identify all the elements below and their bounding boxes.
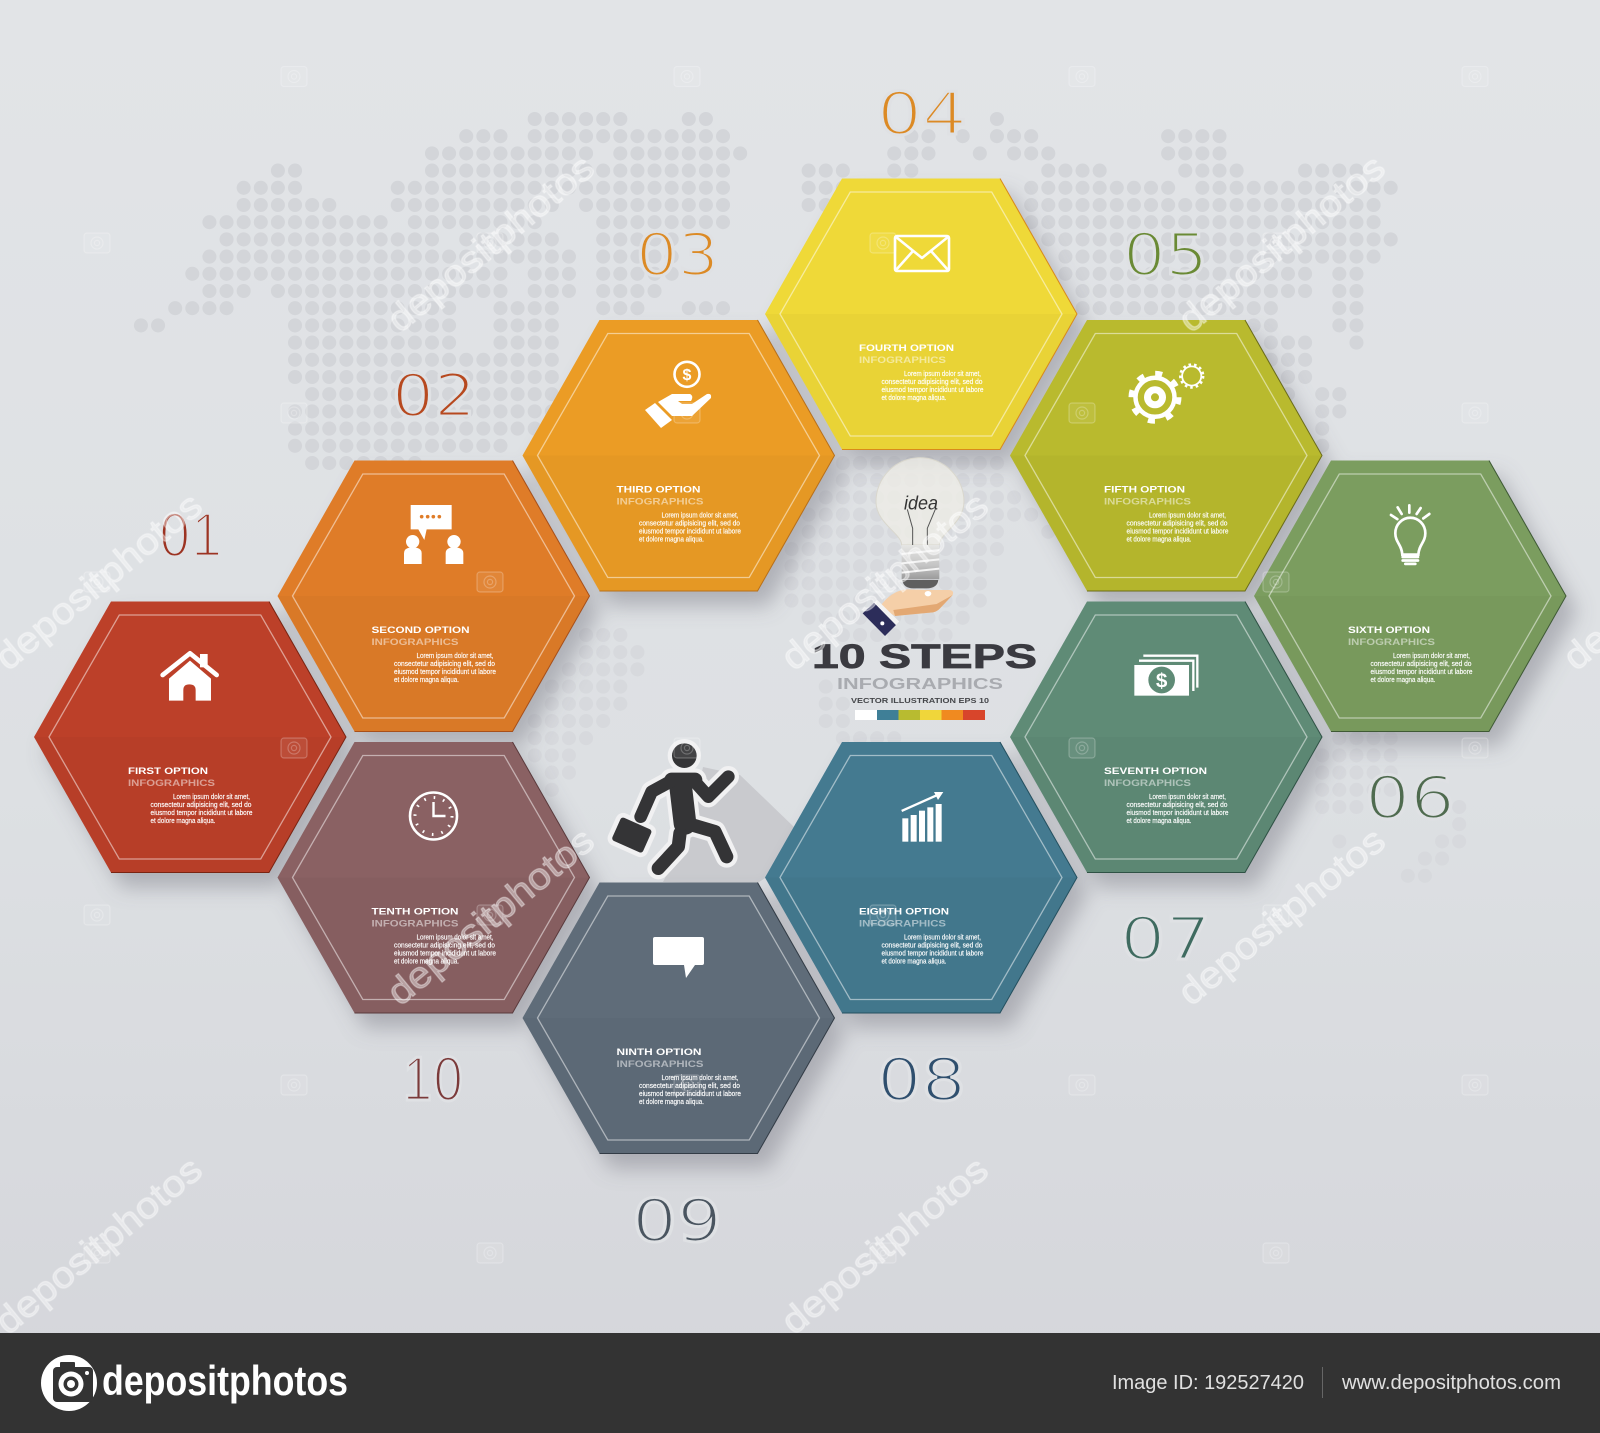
text: ninth option: [616, 1047, 741, 1106]
step numbers: 07: [1120, 904, 1211, 973]
icon: gears: [1132, 365, 1203, 421]
panel: step 8: [765, 742, 1077, 1013]
icon: house: [163, 653, 217, 701]
text: first option: [128, 766, 252, 825]
text: eighth option: [859, 906, 984, 966]
text: sixth option: consectetur adipisicing elit, sed do: [1370, 659, 1472, 668]
text: second option: Lorem ipsum dolor sit amet,: [416, 651, 494, 660]
text: fourth option: [859, 343, 984, 402]
text: second option: et dolore magna aliqua.: [394, 675, 459, 684]
text: ninth option: et dolore magna aliqua.: [639, 1097, 704, 1106]
step numbers: 10: [403, 1045, 464, 1114]
text: sixth option: INFOGRAPHICS: [1348, 637, 1435, 648]
step numbers: 06: [1365, 763, 1455, 832]
text: third option: [616, 484, 741, 544]
panel: step 10: [278, 742, 590, 1013]
text: third option: Lorem ipsum dolor sit amet,: [662, 510, 738, 520]
text: fourth option: FOURTH OPTION: [859, 343, 954, 354]
text: eighth option: et dolore magna aliqua.: [882, 956, 946, 966]
illustration: idea bulb on a hand: [863, 458, 964, 636]
text: third option: INFOGRAPHICS: [616, 496, 704, 508]
step numbers: [158, 79, 1455, 1255]
step numbers: 04: [877, 79, 967, 148]
text: first option: consectetur adipisicing elit, sed do: [150, 800, 252, 809]
step numbers: 01: [158, 501, 222, 570]
centre title block: [812, 458, 1037, 720]
text: second option: SECOND OPTION: [372, 625, 470, 636]
text: tenth option: consectetur adipisicing elit, sed do: [394, 940, 495, 950]
panel: step 9: [522, 882, 834, 1154]
text: tenth option: et dolore magna aliqua.: [394, 956, 459, 966]
text: fifth option: et dolore magna aliqua.: [1126, 534, 1192, 544]
panel: step 4: [765, 178, 1077, 450]
text: first option: FIRST OPTION: [128, 766, 208, 777]
heading: 10 steps: 10 STEPS: [812, 638, 1037, 676]
text: tenth option: Lorem ipsum dolor sit amet,: [416, 932, 494, 942]
panel: step 7: [1010, 602, 1322, 872]
text: seventh option: INFOGRAPHICS: [1104, 778, 1191, 789]
shadow behind runner: [663, 767, 794, 884]
icon: light bulb: [1391, 505, 1429, 564]
text: fifth option: FIFTH OPTION: [1104, 484, 1185, 496]
text: sixth option: eiusmod tempor incididunt ut labore: [1370, 667, 1472, 676]
text: fifth option: Lorem ipsum dolor sit amet,: [1149, 510, 1226, 520]
text: fifth option: INFOGRAPHICS: [1104, 496, 1191, 508]
text: seventh option: eiusmod tempor incididunt ut labore: [1126, 808, 1228, 817]
step numbers: 08: [877, 1045, 966, 1114]
step numbers: 09: [632, 1186, 722, 1255]
icon: rising bar chart: [902, 792, 943, 842]
text: second option: eiusmod tempor incididunt ut labore: [394, 667, 496, 676]
text: seventh option: et dolore magna aliqua.: [1126, 816, 1192, 825]
text: fifth option: consectetur adipisicing elit, sed do: [1126, 518, 1228, 528]
watermark text: depositphotos: [379, 146, 602, 340]
text: sixth option: [1348, 625, 1472, 684]
text: first option: Lorem ipsum dolor sit amet,: [173, 792, 250, 801]
watermark text: depositphotos: [1170, 819, 1393, 1013]
step numbers: 03: [636, 220, 719, 289]
text: seventh option: SEVENTH OPTION: [1104, 766, 1207, 777]
step numbers: 02: [392, 361, 476, 430]
text: second option: INFOGRAPHICS: [372, 637, 459, 648]
logo wordmark: depositphotos: [102, 1357, 348, 1404]
footer banner: [0, 1333, 1600, 1433]
text: eighth option: INFOGRAPHICS: [859, 918, 946, 930]
hexagon drop shadows: [45, 194, 1577, 1168]
illustration: idea bulb on a hand: idea: [904, 493, 938, 514]
text: tenth option: eiusmod tempor incididunt ut labore: [394, 948, 496, 958]
text: fourth option: eiusmod tempor incididunt ut labore: [882, 385, 984, 394]
text: ninth option: consectetur adipisicing elit, sed do: [639, 1081, 740, 1090]
text: eighth option: eiusmod tempor incididunt ut labore: [882, 948, 984, 958]
text: ninth option: eiusmod tempor incididunt ut labore: [639, 1089, 741, 1098]
icon: hand with coin: $: [683, 367, 692, 384]
text: third option: THIRD OPTION: [616, 484, 701, 496]
colour bar legend: [855, 710, 985, 720]
caption: vector illustration: VECTOR ILLUSTRATION EPS 10: [851, 696, 989, 705]
text: eighth option: EIGHTH OPTION: [859, 906, 949, 918]
text: tenth option: [372, 906, 496, 966]
text: tenth option: TENTH OPTION: [372, 906, 459, 918]
text: fourth option: et dolore magna aliqua.: [882, 393, 946, 402]
watermark text: depositphotos: [1170, 146, 1393, 340]
panel: step 6: [1254, 460, 1566, 732]
text: seventh option: [1104, 766, 1228, 825]
text: eighth option: Lorem ipsum dolor sit amet,: [904, 932, 981, 942]
text: ninth option: Lorem ipsum dolor sit amet,: [662, 1073, 738, 1082]
text: sixth option: et dolore magna aliqua.: [1370, 675, 1436, 684]
watermark text: depositphotos: [379, 819, 602, 1013]
text: second option: consectetur adipisicing elit, sed do: [394, 659, 495, 668]
text: fourth option: INFOGRAPHICS: [859, 355, 946, 366]
panel: step 5: [1010, 320, 1322, 591]
text: fifth option: eiusmod tempor incididunt ut labore: [1126, 526, 1228, 536]
icon: people talking: [404, 505, 463, 564]
text: ninth option: NINTH OPTION: [616, 1047, 702, 1058]
text: fourth option: Lorem ipsum dolor sit amet,: [904, 369, 981, 378]
panel: step 2: [278, 460, 590, 732]
site url: www.depositphotos.com: [1341, 1371, 1561, 1394]
step numbers: 05: [1123, 220, 1208, 289]
text: sixth option: SIXTH OPTION: [1348, 625, 1430, 636]
text: eighth option: consectetur adipisicing elit, sed do: [882, 940, 982, 950]
icon: clock: [410, 792, 457, 840]
image id: Image ID: 192527420: [1112, 1371, 1304, 1394]
watermark text: depositphotos: [773, 484, 996, 678]
icon: banknotes: [1134, 656, 1197, 696]
runner with briefcase: [613, 739, 728, 868]
text: fourth option: consectetur adipisicing elit, sed do: [882, 377, 982, 386]
text: second option: [372, 625, 496, 684]
text: first option: INFOGRAPHICS: [128, 778, 215, 789]
text: sixth option: Lorem ipsum dolor sit amet,: [1393, 651, 1470, 660]
icon: speech bubble: [653, 937, 704, 978]
text: ninth option: INFOGRAPHICS: [616, 1059, 704, 1070]
text: third option: eiusmod tempor incididunt ut labore: [639, 526, 741, 536]
text: first option: et dolore magna aliqua.: [150, 816, 216, 825]
dotted world map: [141, 119, 1461, 876]
icon: hand with coin: [645, 362, 711, 428]
subheading: infographics: INFOGRAPHICS: [837, 676, 1003, 693]
logo icon: camera in circle: [41, 1355, 97, 1411]
icon: envelope: [895, 236, 949, 271]
text: third option: consectetur adipisicing elit, sed do: [639, 518, 740, 528]
text: seventh option: consectetur adipisicing elit, sed do: [1126, 800, 1228, 809]
watermark text: depositphotos: [773, 1148, 996, 1342]
text: fifth option: [1104, 484, 1228, 544]
icon: banknotes: $: [1156, 670, 1168, 693]
panel: step 1: [34, 602, 346, 872]
text: seventh option: Lorem ipsum dolor sit amet,: [1149, 792, 1226, 801]
text: tenth option: INFOGRAPHICS: [372, 918, 459, 930]
text: third option: et dolore magna aliqua.: [639, 534, 704, 544]
panel: step 3: [522, 320, 834, 591]
text: first option: eiusmod tempor incididunt ut labore: [150, 808, 252, 817]
watermark camera marks: [84, 66, 1488, 1263]
